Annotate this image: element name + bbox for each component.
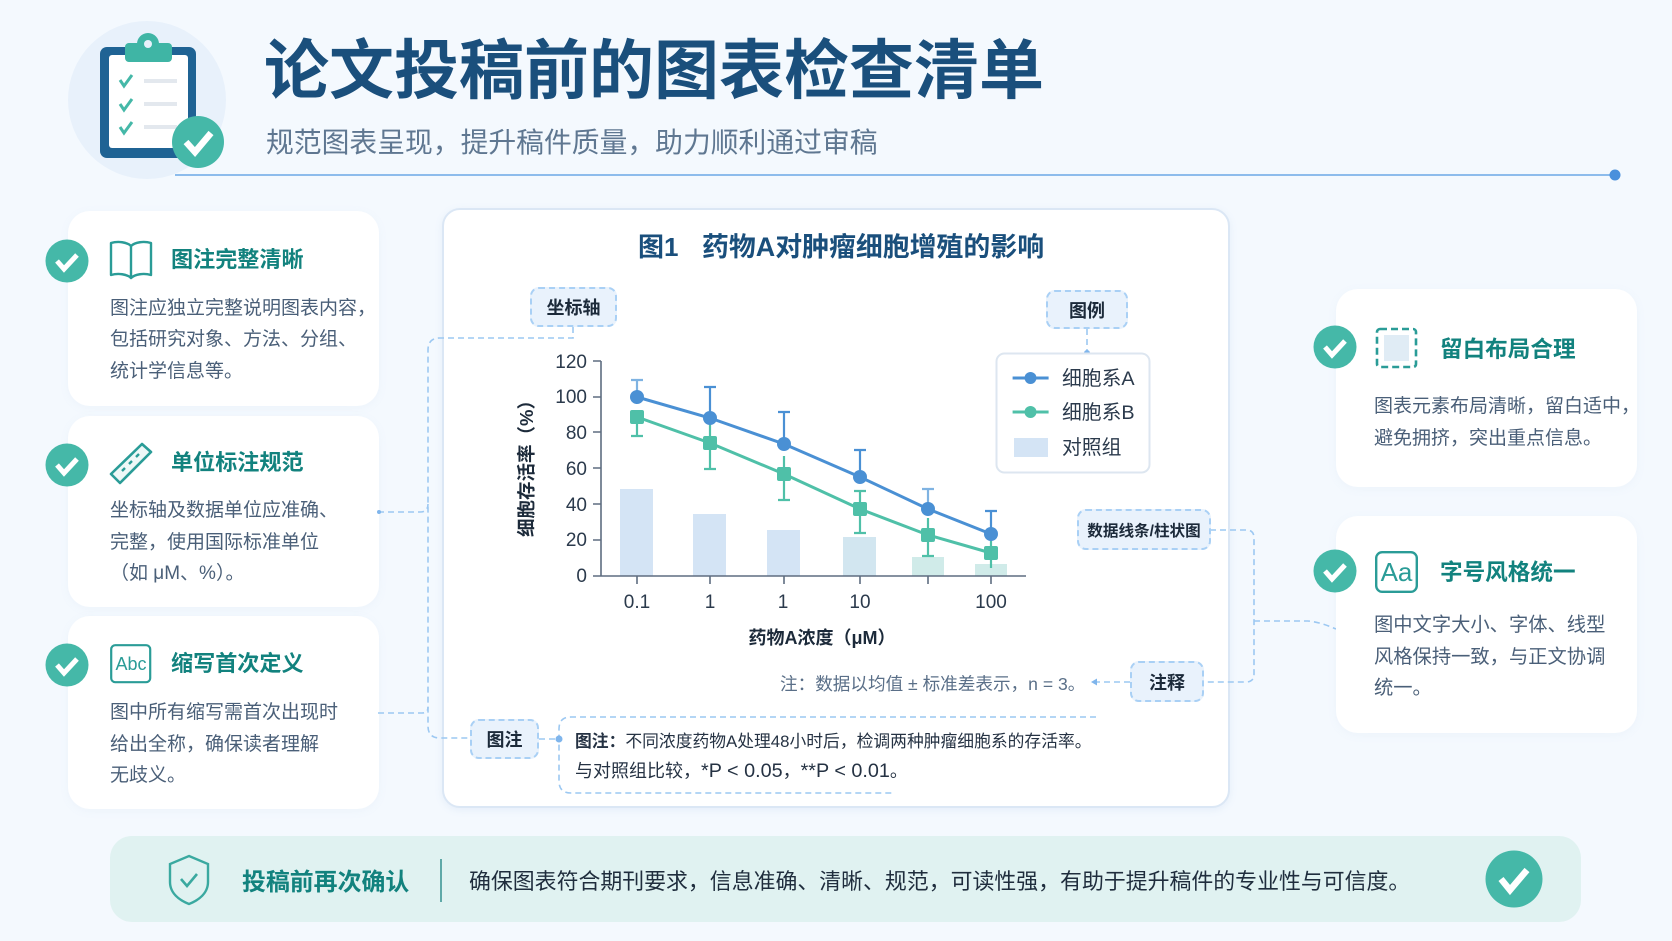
icon: ruler bbox=[110, 442, 152, 484]
tag: axes: 坐标轴 bbox=[546, 298, 600, 318]
icon: open book bbox=[110, 240, 152, 280]
tag: axes bbox=[530, 287, 617, 327]
text: caption complete: 图注应独立完整说明图表内容， bbox=[110, 298, 376, 318]
heading: abbreviations: 缩写首次定义 bbox=[171, 651, 304, 676]
bottom bar divider bbox=[440, 859, 442, 902]
icon: Aa: Aa bbox=[1381, 557, 1413, 587]
icon: dashed whitespace box bbox=[1376, 328, 1418, 368]
check badge 2 bbox=[46, 444, 88, 486]
legend bbox=[996, 354, 1150, 472]
control bars bbox=[620, 489, 1007, 576]
figure title: 药物A对肿瘤细胞增殖的影响 bbox=[702, 232, 1044, 262]
text: layout: 图表元素布局清晰，留白适中， bbox=[1374, 396, 1640, 417]
legend: 细胞系A bbox=[1062, 368, 1135, 390]
check badge 1 bbox=[46, 240, 88, 282]
text: layout: 避免拥挤，突出重点信息。 bbox=[1374, 428, 1602, 448]
panel: caption complete bbox=[68, 211, 379, 406]
series A bbox=[630, 390, 998, 541]
axis titles bbox=[516, 391, 896, 648]
tick labels: 120 bbox=[555, 352, 587, 373]
text: units bbox=[110, 500, 338, 584]
legend: 细胞系B bbox=[1062, 402, 1135, 424]
text: caption complete bbox=[110, 298, 376, 382]
icon: Abc: Abc bbox=[115, 654, 147, 674]
text: abbreviations: 给出全称，确保读者理解 bbox=[110, 734, 319, 754]
tag: annotation: 注释 bbox=[1149, 672, 1185, 692]
tag: data lines bbox=[1077, 509, 1211, 550]
series B error bars bbox=[631, 417, 991, 568]
tick labels: 0 bbox=[576, 566, 587, 587]
heading: layout: 留白布局合理 bbox=[1440, 336, 1576, 362]
subtitle: 规范图表呈现，提升稿件质量，助力顺利通过审稿 bbox=[266, 127, 878, 158]
text: units: 完整，使用国际标准单位 bbox=[110, 532, 319, 552]
header icon: clipboard with check bbox=[68, 21, 226, 179]
legend: 对照组 bbox=[1062, 437, 1121, 459]
caption text bbox=[575, 732, 1092, 782]
tag: annotation bbox=[1130, 661, 1204, 702]
tag: legend: 图例 bbox=[1069, 300, 1105, 320]
tag: data lines: 数据线条/柱状图 bbox=[1087, 522, 1201, 540]
text: caption complete: 统计学信息等。 bbox=[110, 360, 243, 382]
text: units: 坐标轴及数据单位应准确、 bbox=[110, 500, 338, 521]
text: font style: 风格保持一致，与正文协调 bbox=[1374, 646, 1605, 668]
text: abbreviations: 图中所有缩写需首次出现时 bbox=[110, 702, 338, 723]
series A error bars bbox=[631, 380, 997, 534]
tick labels: 100 bbox=[555, 387, 587, 408]
header rule with end dot bbox=[175, 170, 1620, 180]
tag: legend bbox=[1046, 290, 1128, 329]
title: 论文投稿前的图表检查清单 bbox=[264, 34, 1044, 107]
check badge 4 bbox=[1314, 326, 1356, 368]
tick labels: 0.1 bbox=[624, 592, 650, 613]
tick labels: 100 bbox=[975, 592, 1007, 613]
panel: bottom confirmation bar bbox=[110, 836, 1581, 922]
icon: Aa bbox=[1375, 551, 1418, 593]
caption text: 图注：不同浓度药物A处理48小时后，检调两种肿瘤细胞系的存活率。 bbox=[575, 732, 1092, 751]
text: abbreviations bbox=[110, 702, 338, 786]
axis titles: 细胞存活率（%） bbox=[516, 391, 537, 537]
tag: caption: 图注 bbox=[486, 730, 522, 750]
tick labels: 40 bbox=[566, 495, 587, 516]
panel: figure bbox=[442, 208, 1230, 808]
panel: layout bbox=[1336, 289, 1637, 487]
caption text: 与对照组比较，*P < 0.05，**P < 0.01。 bbox=[575, 760, 908, 782]
tick labels: 80 bbox=[566, 423, 587, 444]
heading: bottom bar: 投稿前再次确认 bbox=[242, 869, 409, 896]
tick labels: 10 bbox=[849, 592, 871, 613]
panel: font style bbox=[1336, 516, 1637, 733]
axis titles: 药物A浓度（μM） bbox=[748, 628, 896, 648]
icon: shield bbox=[168, 854, 210, 906]
heading: units: 单位标注规范 bbox=[171, 450, 304, 475]
tick labels bbox=[555, 352, 1007, 613]
figure title: 图1 bbox=[638, 232, 678, 262]
text: units: （如 μM、%）。 bbox=[110, 563, 244, 584]
tag: caption bbox=[470, 719, 539, 759]
panel: abbreviations bbox=[68, 616, 379, 809]
series B bbox=[630, 410, 998, 560]
tick labels: 1 bbox=[705, 592, 715, 613]
check badge 5 bbox=[1314, 550, 1356, 592]
heading: font style: 字号风格统一 bbox=[1440, 560, 1576, 584]
icon: Abc bbox=[110, 644, 152, 684]
text: caption complete: 包括研究对象、方法、分组、 bbox=[110, 329, 357, 350]
text: font style: 图中文字大小、字体、线型 bbox=[1374, 615, 1605, 636]
text: bottom bar: 确保图表符合期刊要求，信息准确、清晰、规范，可读性强，有助于提升稿件的专业性与可信度。 bbox=[469, 869, 1410, 894]
text: layout bbox=[1374, 396, 1640, 448]
tick labels: 20 bbox=[566, 530, 587, 551]
tick labels: 1 bbox=[778, 592, 788, 613]
tick labels: 60 bbox=[566, 459, 587, 480]
axes bbox=[593, 361, 1026, 584]
heading: caption complete: 图注完整清晰 bbox=[171, 247, 304, 272]
check badge: bottom bbox=[1486, 850, 1542, 908]
text: font style bbox=[1374, 614, 1605, 699]
annotation note: 注：数据以均值 ± 标准差表示，n = 3。 bbox=[780, 674, 1085, 694]
check badge 3 bbox=[46, 644, 88, 686]
panel: units bbox=[68, 416, 379, 607]
text: abbreviations: 无歧义。 bbox=[110, 765, 186, 786]
text: font style: 统一。 bbox=[1374, 678, 1432, 699]
